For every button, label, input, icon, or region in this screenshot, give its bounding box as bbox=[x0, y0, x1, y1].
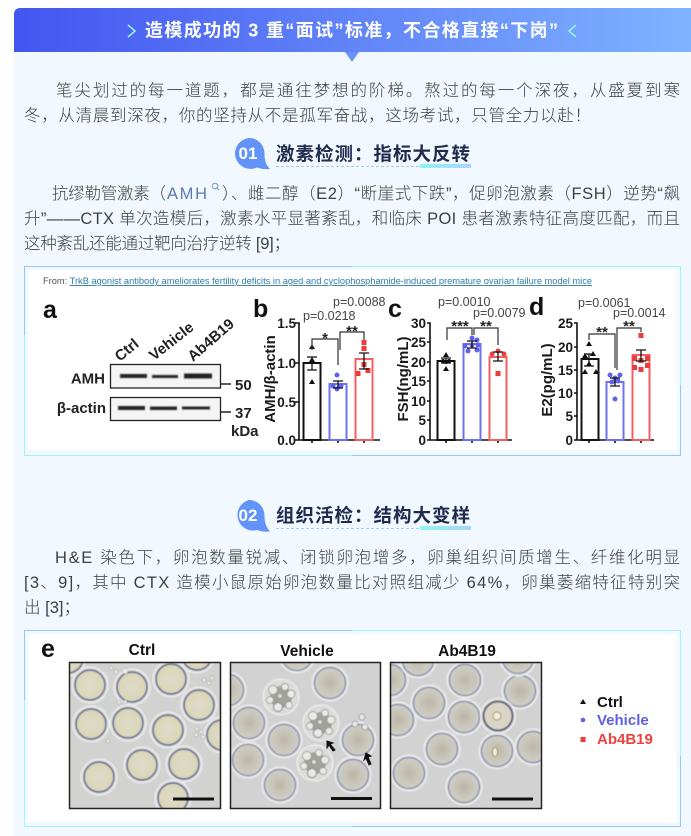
paragraph: hormone test: ）、雌二醇（E2）“断崖式下跌”，促卵泡激素（FSH）逆势“飙 bbox=[222, 184, 680, 203]
heading text 01: 激素检测：指标大反转 bbox=[276, 144, 470, 164]
paragraph: histology: [3、9]，其中 CTX 造模小鼠原始卵泡数量比对照组减少 64%，卵巢萎缩特征特别突 bbox=[24, 573, 680, 592]
chart d: E2: ** bbox=[623, 318, 635, 335]
chart c: FSH: c bbox=[388, 295, 402, 323]
panel a: western blot: Ctrl bbox=[112, 335, 142, 365]
micrograph: Ab4B19 bbox=[390, 662, 542, 810]
chart b: AMH: 0.5 bbox=[277, 395, 296, 410]
image titles bbox=[129, 642, 496, 660]
icon: number bubble 01: 01 bbox=[239, 144, 257, 163]
panel: hormone figure bbox=[24, 266, 680, 456]
panel a: western blot: kDa bbox=[231, 423, 259, 440]
micrograph: Vehicle bbox=[230, 662, 382, 810]
icon: number bubble 02: 02 bbox=[239, 506, 257, 525]
header banner bbox=[14, 8, 691, 62]
header title: 造模成功的 3 重“面试”标准，不合格直接“下岗” bbox=[145, 20, 558, 40]
chart d: E2: 10 bbox=[558, 386, 573, 401]
chart b: AMH: ** bbox=[346, 323, 358, 340]
panel a: western blot: 37 bbox=[235, 405, 252, 422]
chart d: E2: 20 bbox=[558, 340, 573, 355]
chart b: AMH: p=0.0218 bbox=[303, 309, 356, 323]
panel: histology figure: e bbox=[41, 635, 55, 663]
paragraph: histology bbox=[24, 548, 680, 617]
paragraph: hormone test bbox=[24, 183, 680, 253]
icon: number bubble 01 bbox=[235, 138, 270, 169]
chart d: E2: 5 bbox=[565, 409, 573, 424]
chart b: AMH: 0.0 bbox=[277, 433, 296, 448]
intro paragraph bbox=[24, 81, 680, 125]
chart c: FSH: *** bbox=[451, 318, 469, 335]
paragraph: hormone test: 这种紊乱还能通过靶向治疗逆转 [9]； bbox=[24, 234, 290, 253]
image titles: Ctrl bbox=[129, 642, 155, 659]
legend bbox=[580, 694, 653, 748]
source line: From: TrkB agonist antibody ameliorates fertility deficits in aged and cyclophosphamide-induced premature ovarian failure model mice bbox=[43, 276, 592, 286]
panel a: western blot: AMH bbox=[71, 370, 105, 388]
chart c: FSH: FSH(ng/mL) bbox=[395, 337, 412, 421]
panel a: western blot: 50 bbox=[235, 377, 252, 394]
icon: number bubble 02 bbox=[237, 500, 270, 532]
intro paragraph: 笔尖划过的每一道题，都是通往梦想的阶梯。熬过的每一个深夜，从盛夏到寒 bbox=[56, 81, 680, 100]
chart c: FSH: 20 bbox=[411, 355, 426, 370]
chart b: AMH: AMH/β-actin bbox=[262, 335, 279, 423]
panel a: western blot bbox=[43, 296, 259, 440]
chart c: FSH: 25 bbox=[411, 335, 426, 350]
paragraph: histology: 出 [3]； bbox=[24, 598, 80, 617]
paragraph: histology: H&E 染色下，卵泡数量锐减、闭锁卵泡增多，卵巢组织间质增生、纤维化明显 bbox=[55, 548, 680, 567]
chart b: AMH bbox=[253, 295, 386, 448]
legend: Vehicle bbox=[597, 712, 649, 729]
chart c: FSH: 30 bbox=[411, 316, 426, 331]
panel a: western blot: a bbox=[43, 296, 58, 324]
icon: search glyph bbox=[212, 183, 219, 190]
panel a: western blot: Ab4B19 bbox=[184, 316, 238, 365]
panel a: western blot: Vehicle bbox=[146, 319, 197, 364]
heading text 02: 组织活检：结构大变样 bbox=[276, 505, 470, 526]
paragraph: hormone test: 升”——CTX 单次造模后，激素水平显著紊乱，和临床 POI 患者激素特征高度匹配，而且 bbox=[24, 209, 680, 228]
chart c: FSH: p=0.0079 bbox=[473, 306, 526, 320]
icon: right chevron bbox=[569, 25, 576, 37]
chart c: FSH: 0 bbox=[418, 433, 426, 448]
chart c: FSH: 5 bbox=[418, 413, 426, 428]
paragraph: hormone test: AMH bbox=[167, 185, 207, 203]
paragraph: hormone test: 抗缪勒管激素（ bbox=[52, 184, 166, 203]
chart c: FSH bbox=[388, 295, 526, 448]
section heading 01 bbox=[235, 138, 471, 169]
legend: Ab4B19 bbox=[597, 731, 653, 748]
image titles: Ab4B19 bbox=[438, 643, 496, 660]
micrograph: Ctrl bbox=[68, 662, 222, 810]
legend: Ctrl bbox=[597, 694, 623, 711]
chart d: E2: p=0.0061 bbox=[578, 296, 631, 310]
image titles: Vehicle bbox=[280, 643, 334, 660]
chart b: AMH: * bbox=[322, 330, 328, 347]
section heading 02 bbox=[237, 500, 471, 532]
chart c: FSH: p=0.0010 bbox=[438, 295, 491, 309]
chart c: FSH: 10 bbox=[411, 394, 426, 409]
panel: histology figure bbox=[24, 630, 680, 826]
chart b: AMH: 1.0 bbox=[277, 356, 296, 371]
chart b: AMH: p=0.0088 bbox=[333, 295, 386, 309]
icon: left chevron bbox=[128, 25, 135, 37]
chart c: FSH: ** bbox=[480, 318, 492, 335]
chart d: E2: 25 bbox=[558, 316, 573, 331]
chart d: E2 bbox=[529, 293, 666, 448]
chart d: E2: p=0.0014 bbox=[613, 306, 666, 320]
chart d: E2: E2(pg/mL) bbox=[539, 343, 556, 417]
chart d: E2: 15 bbox=[558, 363, 573, 378]
panel a: western blot: β-actin bbox=[57, 400, 106, 417]
chart b: AMH: 1.5 bbox=[277, 316, 296, 331]
chart c: FSH: 15 bbox=[411, 374, 426, 389]
chart d: E2: 0 bbox=[565, 433, 573, 448]
intro paragraph: 冬，从清晨到深夜，你的坚持从不是孤军奋战，这场考试，只管全力以赴！ bbox=[24, 106, 591, 125]
chart d: E2: ** bbox=[596, 324, 608, 341]
chart d: E2: d bbox=[529, 293, 544, 321]
arrows bbox=[327, 741, 371, 765]
chart b: AMH: b bbox=[253, 295, 268, 323]
